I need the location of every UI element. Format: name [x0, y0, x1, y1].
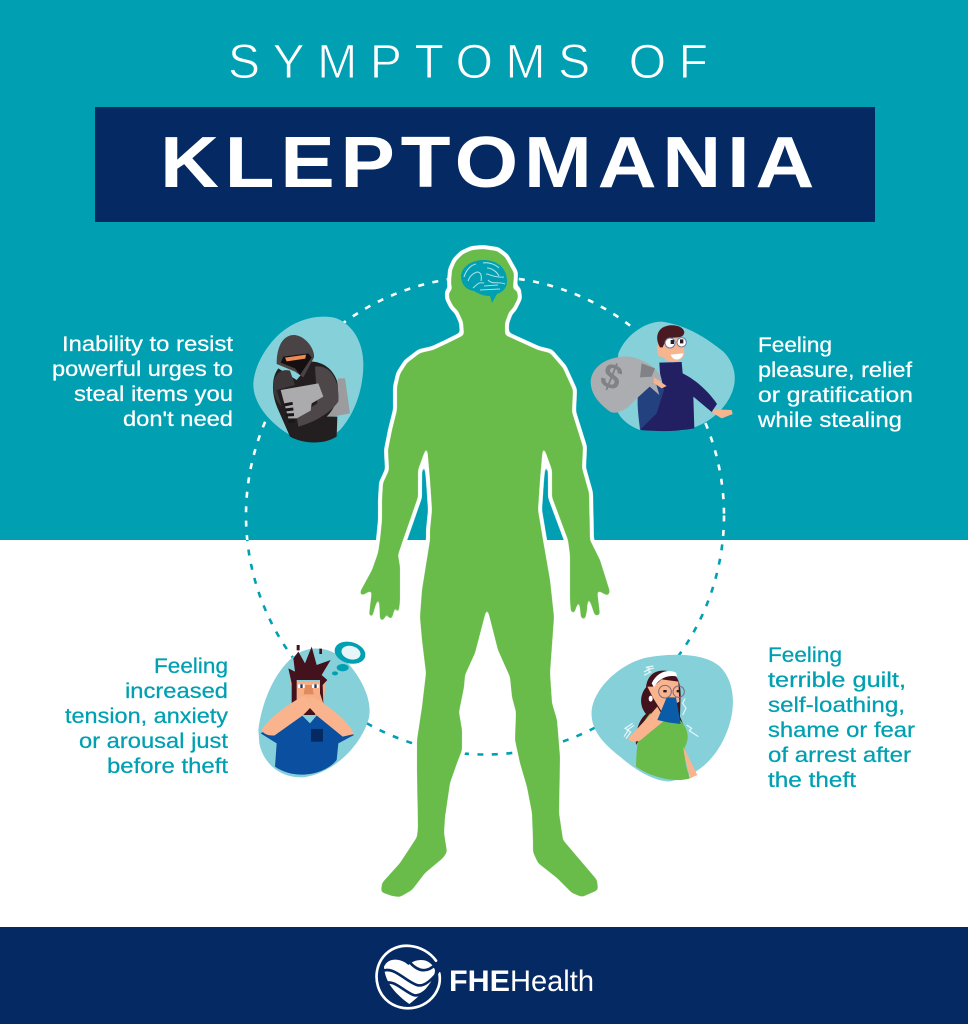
text: feeling guilt: self-loathing, [768, 694, 905, 717]
text: feeling tension: Feeling [154, 655, 228, 678]
jacket sleeve [638, 380, 667, 429]
sack fold [640, 363, 655, 377]
text: feeling guilt: the theft [768, 769, 856, 792]
thought bubble [332, 638, 368, 675]
pupils [300, 684, 317, 688]
dashed ring connecting symptoms [246, 276, 724, 754]
laptop back [318, 378, 350, 419]
earring [649, 696, 653, 702]
face opening [281, 353, 312, 375]
head [290, 682, 326, 713]
text: inability to resist [52, 333, 233, 431]
nose [304, 685, 314, 694]
pocket [311, 729, 323, 742]
left shoulder [273, 370, 295, 407]
glasses [665, 338, 686, 348]
arms [262, 696, 354, 737]
text: feeling guilt: terrible guilt, [768, 669, 906, 692]
hands [653, 377, 733, 418]
human body silhouette [360, 249, 610, 897]
text: feeling guilt: shame or fear [768, 719, 915, 742]
text: inability to resist: don't need [123, 408, 233, 431]
panel: navy footer band [0, 927, 968, 1024]
face [657, 338, 684, 362]
raised arm [628, 707, 665, 742]
symptom illustration: crying woman [592, 655, 733, 781]
panel: white lower background [0, 540, 968, 927]
green top [636, 713, 690, 780]
icon: brain [461, 260, 507, 303]
text: feeling tension: or arousal just [79, 730, 228, 753]
logo wordmark Health: Health [510, 965, 594, 998]
hoodie torso [273, 362, 338, 443]
logo mark [377, 946, 440, 1008]
title: kleptomania: KLEPTOMANIA [160, 123, 820, 203]
text: feeling tension: before theft [107, 755, 228, 778]
logo: FHE Health [377, 946, 594, 1008]
blob backdrop [253, 317, 363, 438]
text: feeling tension [65, 655, 229, 778]
headband [652, 671, 677, 687]
sweater [640, 362, 717, 431]
shaking marks [624, 666, 698, 739]
text: inability to resist: steal items you [74, 383, 233, 406]
glasses [659, 685, 684, 698]
money sack [591, 356, 662, 413]
symptom illustration: anxious man [258, 638, 370, 777]
text: inability to resist: powerful urges to [52, 358, 233, 381]
hair [636, 671, 685, 745]
smile [671, 353, 683, 360]
title: symptoms of: SYMPTOMS OF [228, 36, 708, 89]
blob backdrop [258, 648, 370, 777]
hood [277, 335, 314, 377]
hair [657, 325, 684, 347]
text: inability to resist: Inability to resist [62, 333, 233, 356]
text: feeling guilt [768, 644, 915, 792]
laptop front [281, 383, 323, 418]
text: feeling guilt: Feeling [768, 644, 842, 667]
shirt [261, 712, 354, 775]
title banner [95, 107, 875, 222]
eyes [671, 339, 683, 344]
text: feeling tension: tension, anxiety [65, 705, 229, 728]
text: feeling pleasure: while stealing [757, 409, 902, 432]
sack neck [646, 380, 659, 395]
fingers [284, 403, 295, 422]
blob backdrop [613, 322, 735, 431]
text: feeling pleasure [757, 334, 913, 432]
symptom illustration: hooded thief [253, 317, 363, 443]
eyes [298, 684, 319, 688]
text: feeling pleasure: or gratification [758, 384, 913, 407]
text: feeling guilt: of arrest after [768, 744, 911, 767]
hair and beard [288, 645, 331, 715]
far arm [683, 747, 697, 778]
sleeve [297, 366, 339, 427]
panel: teal upper background [0, 0, 968, 540]
dollar sign: $ [595, 355, 628, 399]
text: feeling pleasure: pleasure, relief [758, 359, 912, 382]
text: feeling pleasure: Feeling [758, 334, 832, 357]
logo wordmark FHE: FHE [449, 965, 510, 998]
blob backdrop [592, 655, 733, 781]
eyes [663, 690, 680, 692]
face [647, 679, 679, 712]
symptom illustration: man with money bag [591, 322, 735, 431]
text: feeling tension: increased [125, 680, 228, 703]
tissue [657, 697, 681, 724]
face strip [285, 355, 306, 361]
